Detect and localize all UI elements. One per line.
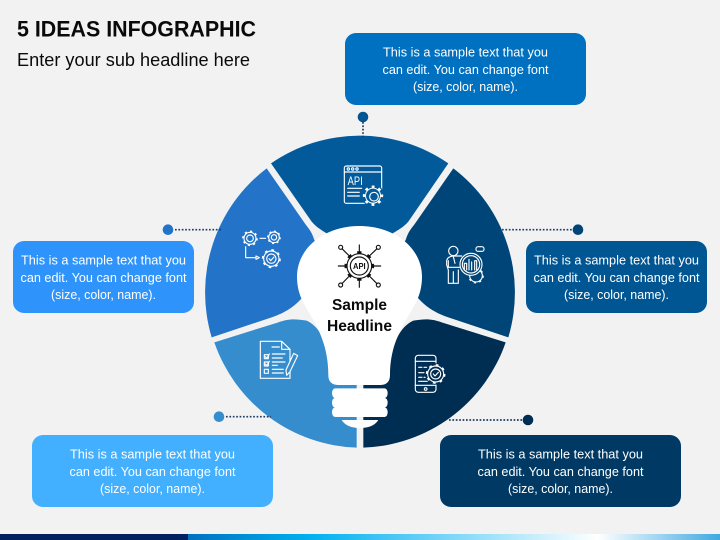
icon: gear workflow (243, 231, 280, 267)
callout: lower left (32, 435, 273, 507)
callout: lower right: (size, color, name). (508, 482, 613, 496)
callout: top (345, 33, 586, 105)
segment: left (205, 168, 333, 337)
connector and marker: right (502, 224, 583, 235)
callout: lower left: (size, color, name). (100, 482, 205, 496)
callout: left: (size, color, name). (51, 288, 156, 302)
connector and marker: top (358, 112, 368, 137)
callout: lower left: This is a sample text that you (70, 448, 235, 462)
title: 5 IDEAS INFOGRAPHIC (17, 16, 256, 42)
callout: left (13, 241, 194, 313)
callout: right: This is a sample text that you (534, 254, 699, 268)
bulb wheel diagram (205, 136, 515, 448)
icon: API gear network: API (353, 261, 366, 271)
center headline: Sample (332, 297, 387, 314)
icon: smartphone with gear (415, 355, 446, 392)
center headline (327, 297, 392, 335)
center headline: Headline (327, 318, 392, 335)
icon: analyst with magnifier (447, 246, 484, 283)
connector and marker: left (163, 224, 222, 235)
callout: top: This is a sample text that you (383, 46, 548, 60)
icon: API window with gear (344, 166, 384, 207)
segment: top (271, 136, 448, 263)
callout: right: (size, color, name). (564, 288, 669, 302)
callout: lower right: can edit. You can change font (478, 465, 644, 479)
callout: lower right (440, 435, 681, 507)
segment: lower left (214, 319, 357, 448)
icon: API gear network (338, 245, 381, 287)
connector and marker: lower right (449, 415, 533, 425)
light bulb (297, 226, 422, 428)
callout: top: (size, color, name). (413, 80, 518, 94)
icon: checklist and pencil (260, 341, 298, 378)
connector and marker: lower left (214, 411, 271, 422)
footer bar (0, 534, 720, 540)
callout: lower left: can edit. You can change font (70, 465, 236, 479)
segment: right (387, 168, 515, 337)
subtitle: Enter your sub headline here (17, 50, 250, 70)
callout: lower right: This is a sample text that you (478, 448, 643, 462)
bulb screw base (332, 388, 388, 428)
callout: left: This is a sample text that you (21, 254, 186, 268)
callout: right (526, 241, 707, 313)
segment: lower right (363, 319, 506, 448)
bulb glass (297, 226, 422, 385)
callout: left: can edit. You can change font (20, 271, 187, 285)
callout: right: can edit. You can change font (534, 271, 700, 285)
icon: API window with gear: API (348, 175, 363, 188)
callout: top: can edit. You can change font (382, 63, 549, 77)
